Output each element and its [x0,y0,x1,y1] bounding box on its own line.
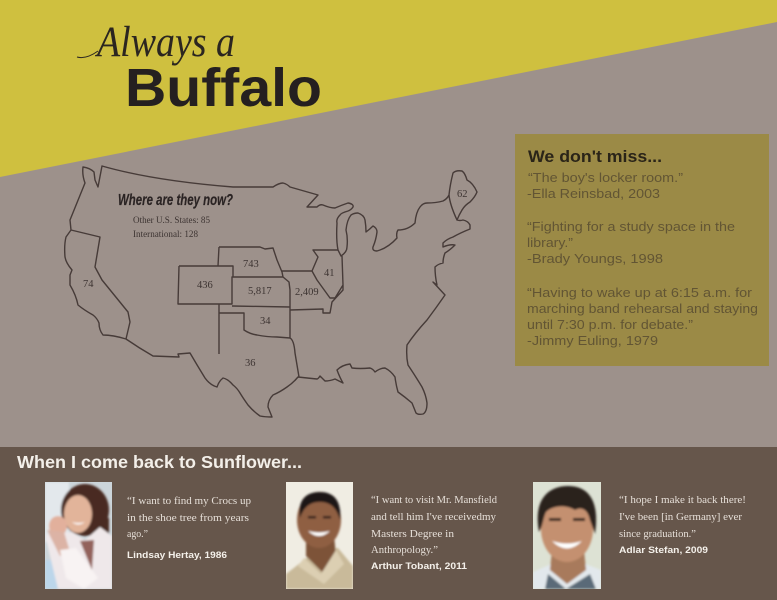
photo: Arthur Tobant [286,482,353,589]
quote: Lindsay Hertay [127,496,251,561]
state numbers: 743 [243,259,259,270]
panel: US map [65,166,477,417]
quote: Arthur Tobant: “I want to visit Mr. Mansfield [371,495,498,506]
quote: Adlar Stefan: since graduation.” [619,529,696,540]
quote: Adlar Stefan [619,495,746,556]
state numbers: 41 [324,268,334,279]
quote: Jimmy Euling: until 7:30 p.m. for debate.” [527,318,693,332]
photo: Lindsay Hertay [45,482,112,589]
quote: Arthur Tobant: and tell him I've receivedmy [371,512,497,523]
quote: Ella Reinsbad: “The boy's locker room.” [528,171,683,185]
state numbers [83,189,468,369]
quote: Adlar Stefan: Adlar Stefan, 2009 [619,545,708,556]
quote: Arthur Tobant [371,495,498,572]
section heading: When I come back to Sunflower... [17,452,302,472]
quote: Arthur Tobant: Masters Degree in [371,529,455,540]
quote: Ella Reinsbad [527,171,683,201]
yellow title banner [0,0,777,177]
heading: where are they now: Where are they now? [118,192,233,209]
state borders [71,195,457,377]
state numbers: 34 [260,316,271,327]
quote: Adlar Stefan: I've been [in Germany] ever [619,512,743,523]
state numbers: 2,409 [295,287,319,298]
panel: when I come back [0,447,777,600]
quote: Arthur Tobant: Anthropology.” [371,545,438,556]
quote: Adlar Stefan: “I hope I make it back there! [619,495,746,506]
panel heading: We don't miss... [528,147,662,166]
quote: Ella Reinsbad: -Ella Reinsbad, 2003 [527,187,660,201]
panel: we don't miss [515,134,769,366]
map outline [65,166,477,417]
state numbers: 74 [83,279,94,290]
state numbers: 436 [197,280,213,291]
photo: Adlar Stefan [533,482,601,589]
quote: Lindsay Hertay: Lindsay Hertay, 1986 [127,550,227,561]
quote: Jimmy Euling: -Jimmy Euling, 1979 [527,334,658,348]
state numbers: 36 [245,358,256,369]
quote: Brady Youngs: “Fighting for a study space in the [527,220,735,234]
quote: Brady Youngs [527,220,735,266]
quote: Lindsay Hertay: “I want to find my Crocs up [127,496,251,507]
title: Buffalo [125,58,322,118]
quote: Jimmy Euling [527,286,758,348]
other states count: Other U.S. States: 85 [133,215,210,225]
state numbers: 62 [457,189,468,200]
quote: Arthur Tobant: Arthur Tobant, 2011 [371,561,468,572]
title: Always a [94,19,235,66]
quote: Brady Youngs: -Brady Youngs, 1998 [527,252,663,266]
quote: Jimmy Euling: “Having to wake up at 6:15 a.m. for [527,286,752,300]
international count: International: 128 [133,229,199,239]
state numbers: 5,817 [248,286,272,297]
quote: Jimmy Euling: marching band rehearsal and staying [527,302,758,316]
title [77,19,322,118]
quote: Lindsay Hertay: in the shoe tree from years [127,513,249,524]
quote: Lindsay Hertay: ago.” [127,529,148,540]
quote: Brady Youngs: library.” [527,236,573,250]
